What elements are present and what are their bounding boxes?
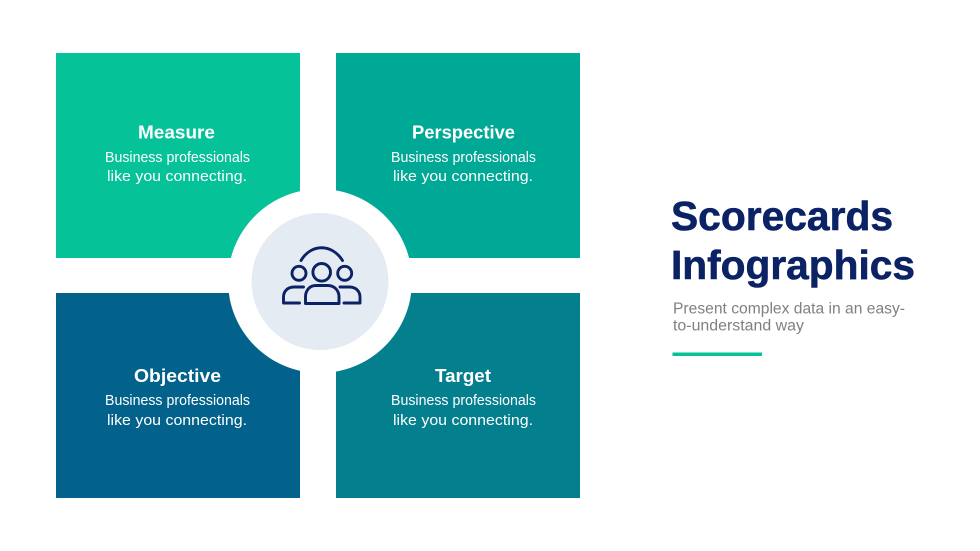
panel: Target (336, 293, 580, 498)
accent line (672, 352, 762, 356)
center badge (252, 213, 388, 350)
center white ring (228, 189, 412, 373)
text: Target description: like you connecting. (393, 413, 533, 429)
heading: Perspective: Perspective (412, 122, 515, 142)
panel: Objective (56, 293, 300, 498)
text: Objective description: like you connecting. (107, 413, 247, 429)
panel: Perspective (336, 53, 580, 258)
text: Objective description: Business professionals (105, 393, 250, 409)
icon: group of people (284, 248, 360, 304)
title: Infographics (671, 242, 915, 288)
subtitle: Present complex data in an easy- (673, 300, 905, 318)
text: Measure description: Business professionals (105, 150, 250, 166)
heading: Measure: Measure (138, 122, 215, 142)
text: Measure description: like you connecting. (107, 169, 247, 185)
panel: Measure (56, 53, 300, 258)
subtitle: to-understand way (673, 318, 804, 334)
heading: Objective: Objective (134, 365, 221, 386)
title: Scorecards (671, 193, 893, 239)
heading: Target: Target (435, 365, 491, 386)
text: Perspective description: like you connecting. (393, 169, 533, 185)
text: Target description: Business professionals (391, 393, 536, 409)
text: Perspective description: Business professionals (391, 150, 536, 166)
